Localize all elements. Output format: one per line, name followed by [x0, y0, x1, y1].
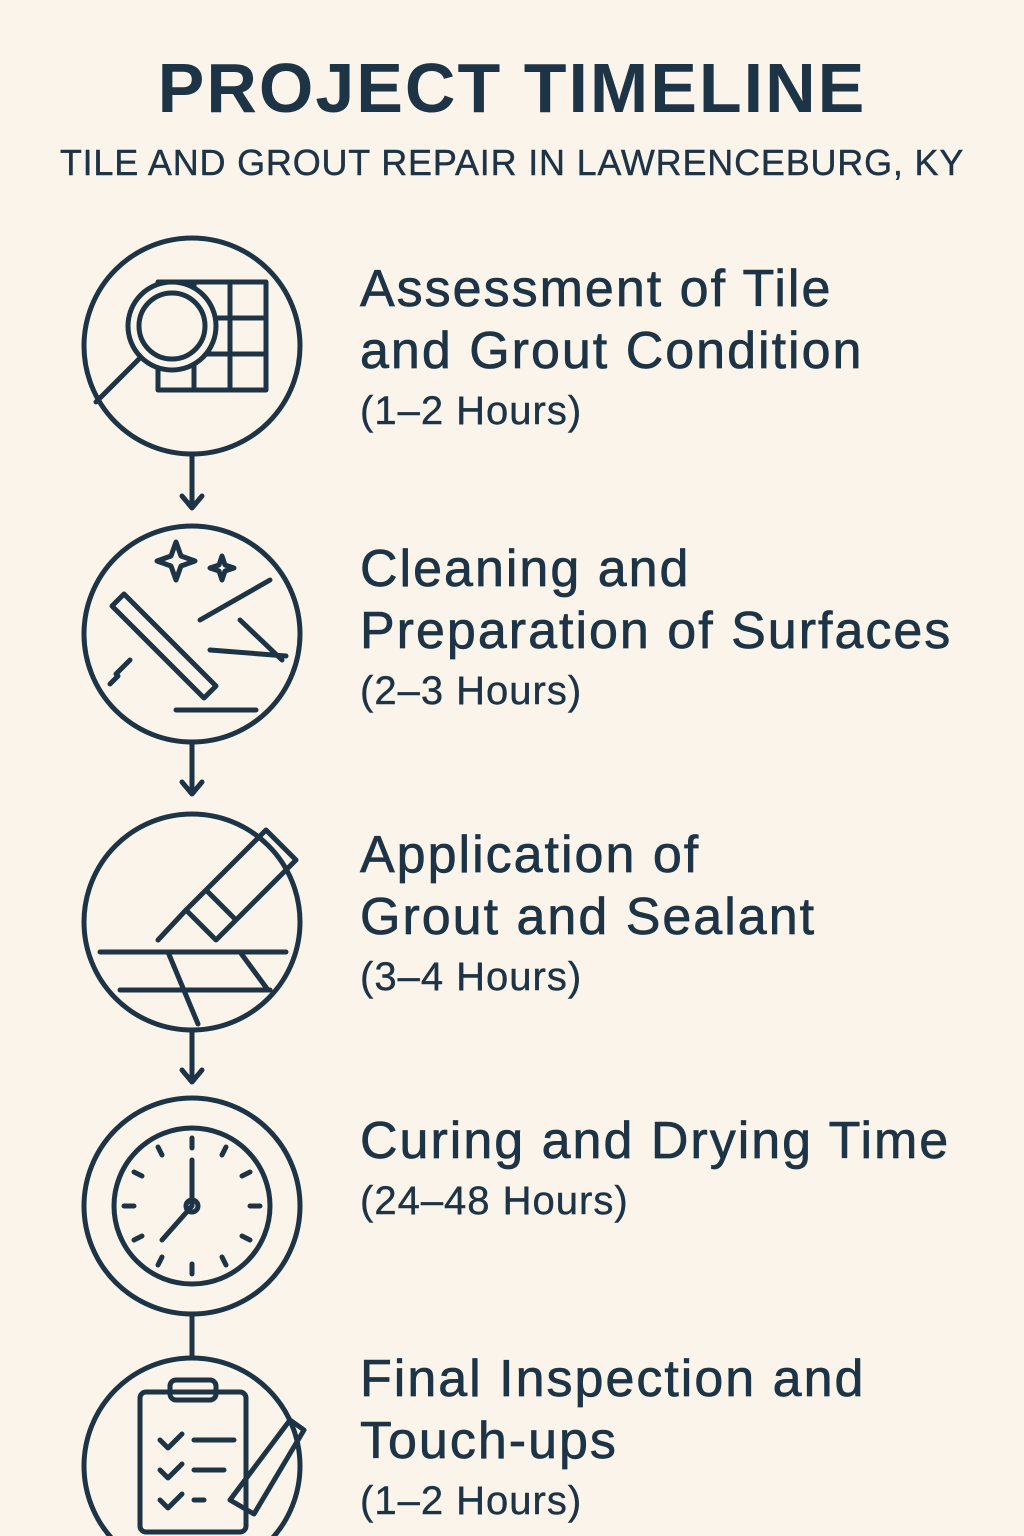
icon: grout applicator	[84, 814, 300, 1030]
step 3	[360, 826, 816, 999]
connector	[190, 1314, 194, 1358]
subtitle: TILE AND GROUT REPAIR IN LAWRENCEBURG, KY	[60, 142, 964, 183]
step 2: Cleaning and	[360, 540, 690, 598]
icon: magnifier and tiles	[84, 238, 300, 454]
step 5: Touch-ups	[360, 1412, 618, 1470]
title: PROJECT TIMELINE	[158, 49, 866, 127]
step 3: Application of	[360, 826, 700, 884]
step 5: (1–2 Hours)	[360, 1479, 582, 1523]
step 3: (3–4 Hours)	[360, 955, 582, 999]
step 4: (24–48 Hours)	[360, 1179, 629, 1223]
step 2: (2–3 Hours)	[360, 669, 582, 713]
step 1: Assessment of Tile	[360, 260, 832, 318]
arrow	[182, 454, 202, 508]
step 1: (1–2 Hours)	[360, 389, 582, 433]
arrow	[182, 742, 202, 794]
step 5	[360, 1350, 865, 1523]
step 2	[360, 540, 952, 713]
icon: clock	[84, 1098, 300, 1314]
step 4	[360, 1112, 950, 1223]
step 1: and Grout Condition	[360, 322, 863, 380]
step 5: Final Inspection and	[360, 1350, 865, 1408]
timeline icons	[82, 236, 307, 1536]
step 2: Preparation of Surfaces	[360, 602, 952, 660]
arrow	[182, 1030, 202, 1082]
step 4: Curing and Drying Time	[360, 1112, 950, 1170]
step 1	[360, 260, 863, 433]
step 3: Grout and Sealant	[360, 888, 816, 946]
icon: cleaning	[84, 526, 300, 742]
icon: clipboard	[84, 1358, 304, 1536]
